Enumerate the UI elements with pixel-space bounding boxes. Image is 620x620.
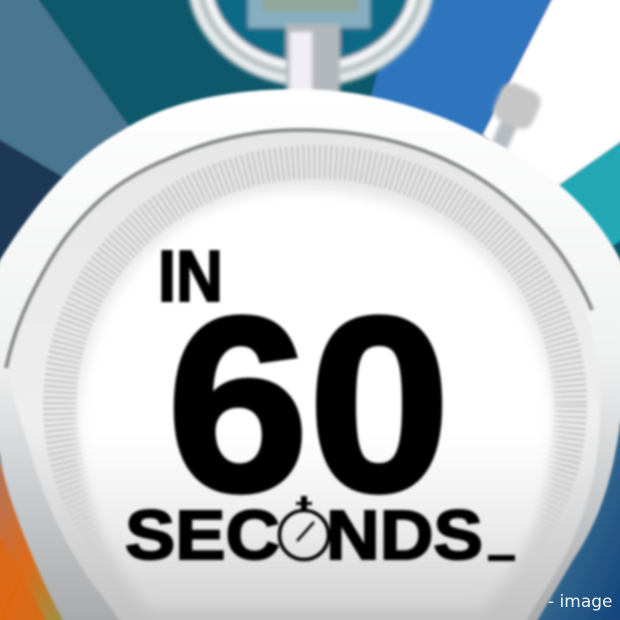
- side pusher button: [490, 79, 544, 152]
- crown knob: [248, 0, 370, 28]
- wedge: orange corner: [0, 440, 70, 620]
- wedge: slate blue: [0, 0, 135, 185]
- title: SECONDS left part: SEC: [125, 496, 280, 574]
- dial: white centre face: [80, 190, 553, 610]
- bow ring: [199, 0, 423, 75]
- dial: outer bezel: [8, 130, 600, 620]
- bow ring interior: [199, 0, 423, 75]
- wedge: bright blue: [370, 0, 556, 135]
- icon: stopwatch letter O: [280, 496, 328, 560]
- title: IN: IN: [158, 237, 223, 317]
- title lettering: [125, 237, 515, 574]
- caption: - image: [548, 592, 612, 612]
- dial: tick marks: [60, 162, 570, 620]
- wedge: teal: [557, 136, 620, 246]
- crown stem: [286, 24, 340, 96]
- wedge: deep blue corner: [525, 400, 620, 620]
- title: trailing cursor: [488, 555, 515, 561]
- title: 60: 60: [167, 265, 450, 543]
- wedge: navy: [0, 135, 70, 270]
- wedge: white: [483, 0, 620, 192]
- title: SECONDS right part: NDS: [326, 496, 483, 574]
- dial: inner ring line: [6, 130, 592, 368]
- stopwatch crown and bow: [193, 0, 429, 96]
